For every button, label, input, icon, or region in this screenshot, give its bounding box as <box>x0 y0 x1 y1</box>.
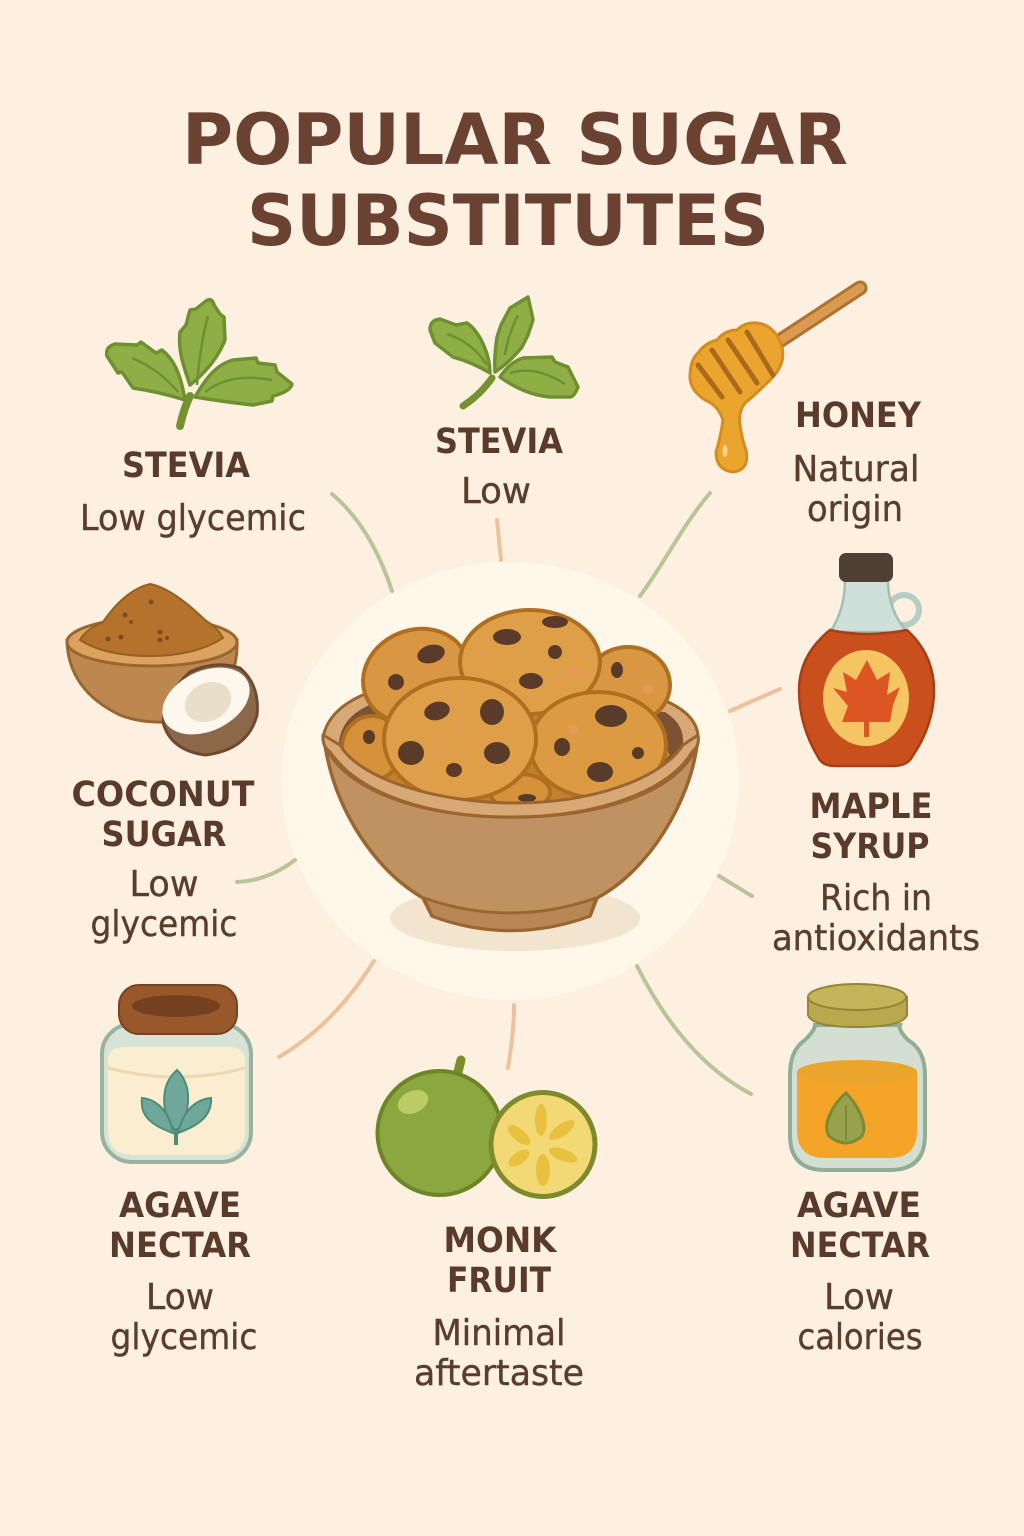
cookies <box>342 610 670 810</box>
item: coconut sugar: SUGAR <box>102 815 227 855</box>
chocolate chips <box>363 616 644 802</box>
item: stevia center: Low <box>461 471 531 512</box>
icon: golden syrup jar <box>790 984 925 1170</box>
bowl interior <box>339 704 683 812</box>
item: monk fruit: Minimal <box>432 1313 566 1354</box>
item: agave nectar left: AGAVE <box>119 1186 241 1226</box>
cookie specks <box>420 649 653 781</box>
item: agave nectar left: glycemic <box>110 1317 258 1358</box>
icon: bowl of cookies <box>323 610 698 951</box>
item: maple syrup: MAPLE <box>810 787 932 827</box>
icon: maple syrup bottle <box>799 553 934 766</box>
item: coconut sugar <box>67 584 260 945</box>
item: monk fruit: MONK <box>444 1221 558 1261</box>
icon: honey dipper <box>690 288 860 472</box>
connector lines <box>237 493 780 1094</box>
item: maple syrup: Rich in <box>820 878 932 919</box>
item: honey: origin <box>807 489 903 530</box>
icon: stevia sprig <box>430 297 578 406</box>
item: honey <box>690 288 922 530</box>
central glow circle <box>281 562 739 1000</box>
icon: agave jar with leaf <box>102 985 251 1162</box>
title: POPULAR SUGAR <box>182 99 848 181</box>
item: stevia left: STEVIA <box>122 446 250 486</box>
item: agave nectar left: NECTAR <box>109 1226 251 1266</box>
bowl rim front <box>323 735 698 817</box>
item: coconut sugar: Low <box>130 864 198 905</box>
item: stevia center: STEVIA <box>435 422 563 462</box>
item: monk fruit: aftertaste <box>414 1353 584 1394</box>
item: agave nectar right: calories <box>798 1317 922 1358</box>
item: agave nectar left: Low <box>146 1277 214 1318</box>
bowl foot line <box>424 898 596 930</box>
icon: stevia sprig <box>107 300 292 426</box>
item: agave nectar right: AGAVE <box>797 1186 921 1226</box>
item: stevia left <box>80 300 306 539</box>
item: coconut sugar: COCONUT <box>72 775 255 815</box>
item: honey: HONEY <box>795 396 922 436</box>
bowl back rim <box>323 692 698 820</box>
item: agave nectar right: Low <box>824 1277 894 1318</box>
item: monk fruit: FRUIT <box>447 1261 551 1301</box>
item: agave nectar left <box>102 985 258 1358</box>
item: maple syrup: antioxidants <box>772 918 980 959</box>
title: SUBSTITUTES <box>247 180 769 262</box>
item: maple syrup <box>772 553 980 959</box>
bowl shadow <box>390 885 640 951</box>
icon: bowl of coconut sugar with coconut <box>67 584 260 755</box>
item: stevia left: Low glycemic <box>80 498 306 539</box>
bowl body <box>325 745 697 930</box>
item: agave nectar right <box>790 984 930 1358</box>
item: monk fruit <box>378 1060 595 1394</box>
item: stevia center <box>430 297 578 512</box>
item: maple syrup: SYRUP <box>810 827 930 867</box>
cookie base fill <box>350 700 670 810</box>
title <box>182 99 848 262</box>
item: agave nectar right: NECTAR <box>790 1226 930 1266</box>
item: honey: Natural <box>792 449 920 490</box>
icon: monk fruit <box>378 1060 595 1196</box>
item: coconut sugar: glycemic <box>90 904 238 945</box>
